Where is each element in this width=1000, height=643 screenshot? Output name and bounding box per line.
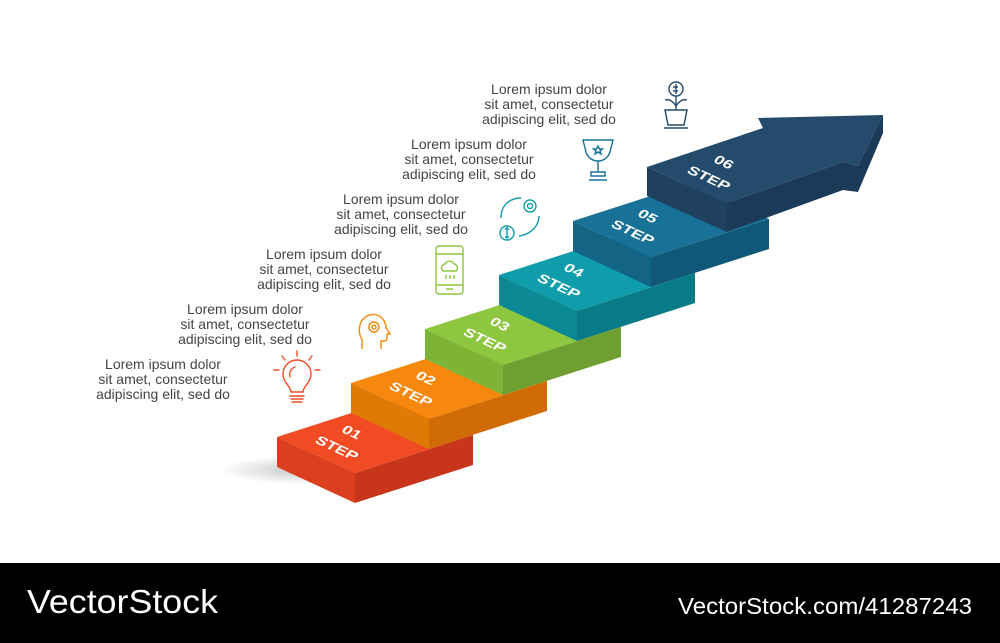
step 03: 03 (486, 315, 513, 334)
text block 4 (334, 191, 468, 237)
text block 5: adipiscing elit, sed do (402, 166, 536, 182)
text block 5: sit amet, consectetur (404, 151, 534, 167)
icon: money cycle (500, 198, 539, 240)
step 06 arrow: STEP (684, 164, 733, 194)
step 01: STEP (312, 434, 361, 464)
text block 4: Lorem ipsum dolor (343, 191, 459, 207)
step 06 arrow: 06 (710, 153, 737, 172)
step 03: STEP (460, 326, 509, 356)
step 01: 01 (338, 423, 365, 442)
text block 3 (257, 246, 391, 292)
text block 2: adipiscing elit, sed do (178, 331, 312, 347)
footer url: VectorStock.com/41287243 (678, 593, 972, 619)
text block 4: adipiscing elit, sed do (334, 221, 468, 237)
step 05: STEP (608, 218, 657, 248)
step 02: STEP (386, 380, 435, 410)
text block 3: sit amet, consectetur (259, 261, 389, 277)
text block 1: Lorem ipsum dolor (105, 356, 221, 372)
step 01 (277, 399, 473, 503)
step 03 (425, 291, 621, 395)
step 06 arrow (647, 115, 883, 232)
icon: trophy (583, 140, 613, 180)
step 05: 05 (634, 207, 661, 226)
icon: plant with coin (664, 82, 688, 128)
text block 4: sit amet, consectetur (336, 206, 466, 222)
step 04: 04 (560, 261, 587, 280)
text block 1: adipiscing elit, sed do (96, 386, 230, 402)
text block 3: adipiscing elit, sed do (257, 276, 391, 292)
text block 6: sit amet, consectetur (484, 96, 614, 112)
text block 2: Lorem ipsum dolor (187, 301, 303, 317)
icon: light bulb (274, 351, 320, 402)
text block 6: Lorem ipsum dolor (491, 81, 607, 97)
step 04 (499, 237, 695, 341)
text block 1 (96, 356, 230, 402)
text block 5: Lorem ipsum dolor (411, 136, 527, 152)
step 04: STEP (534, 272, 583, 302)
text block 3: Lorem ipsum dolor (266, 246, 382, 262)
footer bar (0, 563, 1000, 643)
text block 1: sit amet, consectetur (98, 371, 228, 387)
text block 2 (178, 301, 312, 347)
text block 2: sit amet, consectetur (180, 316, 310, 332)
footer logo: VectorStock (27, 583, 219, 620)
shadow (220, 456, 380, 484)
text block 6: adipiscing elit, sed do (482, 111, 616, 127)
text block 5 (402, 136, 536, 182)
step 02: 02 (412, 369, 439, 388)
step 02 (351, 345, 547, 449)
icon: head with gear (359, 314, 390, 349)
step 05 (573, 183, 769, 287)
text block 6 (482, 81, 616, 127)
icon: phone with cloud (436, 246, 463, 294)
